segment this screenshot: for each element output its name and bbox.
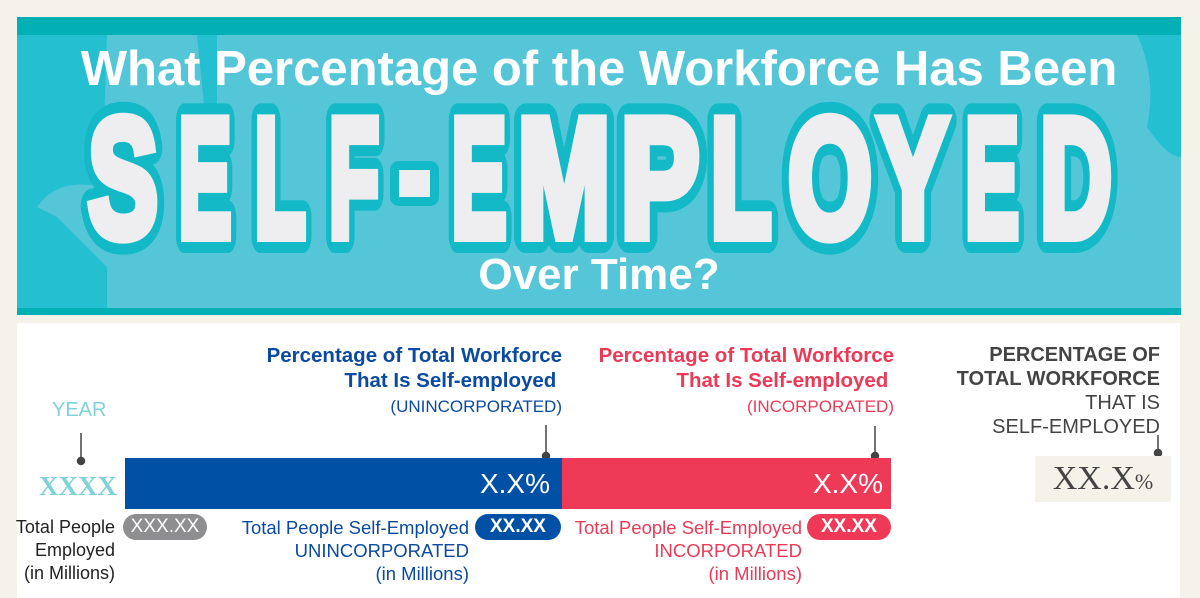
- incorporated heading: Percentage of Total Workforce: [599, 344, 894, 367]
- bar: incorporated: X.X%: [813, 468, 883, 499]
- bar: incorporated: [562, 458, 891, 509]
- title: SELF-EMPLOYED: S: [88, 83, 158, 272]
- total employed label: [16, 517, 115, 583]
- year label: YEAR: [52, 399, 106, 421]
- pill: unincorporated: XX.XX: [490, 516, 546, 537]
- unincorporated count label: [242, 517, 469, 584]
- title: SELF-EMPLOYED: P: [621, 84, 699, 272]
- title: SELF-EMPLOYED: L: [711, 85, 771, 273]
- title: SELF-EMPLOYED: F: [329, 85, 379, 273]
- title: SELF-EMPLOYED: E: [179, 84, 231, 272]
- pill: incorporated: XX.XX: [821, 516, 877, 537]
- title: SELF-EMPLOYED: S: [88, 83, 158, 272]
- total value: XX.X%: [1053, 460, 1153, 497]
- title line 1: What Percentage of the Workforce Has Been: [81, 42, 1117, 96]
- incorporated heading: [599, 344, 894, 416]
- bar: unincorporated: [125, 458, 562, 509]
- pill: unincorporated: [475, 514, 561, 540]
- incorporated count label: [575, 517, 802, 584]
- title: SELF-EMPLOYED: E: [452, 85, 506, 273]
- total heading: SELF-EMPLOYED: [992, 416, 1160, 438]
- title: SELF-EMPLOYED: F: [329, 85, 379, 273]
- total employed label: (in Millions): [24, 563, 115, 583]
- unincorporated heading: (UNINCORPORATED): [390, 397, 562, 416]
- pill: total employed: XXX.XX: [131, 516, 199, 537]
- total heading: PERCENTAGE OF: [989, 344, 1160, 366]
- title: SELF-EMPLOYED: L: [254, 85, 306, 273]
- title: SELF-EMPLOYED: D: [1040, 85, 1112, 273]
- total heading: THAT IS: [1085, 392, 1160, 414]
- unincorporated heading: [267, 344, 562, 416]
- title: SELF-EMPLOYED: O: [788, 84, 872, 272]
- pill: incorporated: [807, 514, 891, 540]
- title: SELF-EMPLOYED: E: [965, 84, 1019, 272]
- incorporated count label: INCORPORATED: [654, 540, 802, 561]
- title: SELF-EMPLOYED: O: [788, 84, 872, 272]
- total heading: TOTAL WORKFORCE: [957, 368, 1160, 390]
- incorporated heading: That Is Self-employed: [676, 369, 888, 392]
- title: SELF-EMPLOYED: E: [965, 84, 1019, 272]
- title: SELF-EMPLOYED: D: [1040, 85, 1112, 273]
- title: SELF-EMPLOYED: E: [452, 85, 506, 273]
- title: SELF-EMPLOYED: L: [711, 85, 771, 273]
- bar: unincorporated: X.X%: [480, 468, 550, 499]
- unincorporated count label: Total People Self-Employed: [242, 517, 469, 538]
- panel: chart legend: [17, 323, 1180, 598]
- title: SELF-EMPLOYED: E: [179, 84, 231, 272]
- title line 3: Over Time?: [478, 250, 720, 299]
- title: SELF-EMPLOYED: M: [518, 85, 610, 273]
- pill: total employed: [123, 514, 207, 540]
- unincorporated heading: Percentage of Total Workforce: [267, 344, 562, 367]
- title: SELF-EMPLOYED: Y: [878, 83, 948, 272]
- title: SELF-EMPLOYED: P: [621, 84, 699, 272]
- incorporated count label: Total People Self-Employed: [575, 517, 802, 538]
- unincorporated count label: (in Millions): [375, 563, 469, 584]
- title: SELF-EMPLOYED: Y: [878, 83, 948, 272]
- total heading: [956, 344, 1160, 438]
- title: SELF-EMPLOYED: [80, 83, 1118, 273]
- unincorporated count label: UNINCORPORATED: [295, 540, 469, 561]
- year value: XXXX: [39, 471, 117, 501]
- total employed label: Employed: [35, 540, 115, 560]
- incorporated count label: (in Millions): [708, 563, 802, 584]
- incorporated heading: (INCORPORATED): [747, 397, 894, 416]
- unincorporated heading: That Is Self-employed: [344, 369, 556, 392]
- title: SELF-EMPLOYED: M: [518, 85, 610, 273]
- title: SELF-EMPLOYED: L: [254, 85, 306, 273]
- total value: [1035, 456, 1171, 502]
- total employed label: Total People: [16, 517, 115, 537]
- header banner: [17, 17, 1181, 315]
